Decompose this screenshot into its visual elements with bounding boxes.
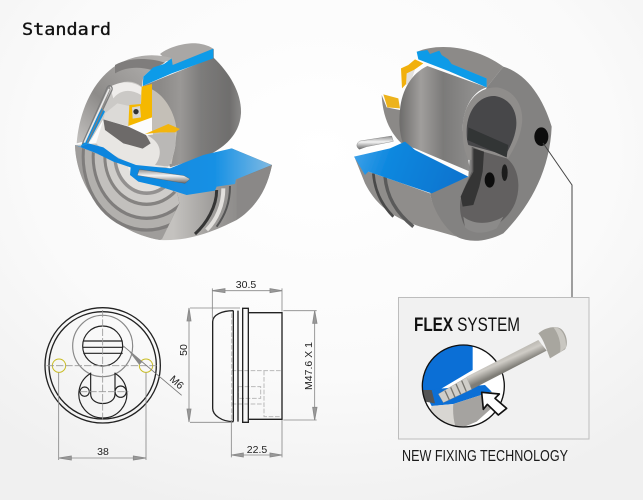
cylinder body <box>399 66 487 172</box>
flex bolt illustration <box>420 327 567 430</box>
key slot <box>103 119 151 149</box>
inner disc <box>90 82 142 142</box>
cylinder body <box>143 57 241 167</box>
threaded cylinder top <box>160 43 214 66</box>
lower threaded section <box>355 158 457 237</box>
yellow cam parts <box>401 59 423 88</box>
spring pin upper <box>82 86 112 144</box>
outer circles <box>45 308 160 423</box>
title: Standard <box>22 20 111 40</box>
upper flange <box>77 55 173 143</box>
spring pin <box>357 136 393 149</box>
technical drawing: front view <box>45 308 182 460</box>
yellow cam parts <box>128 84 152 126</box>
plug ledge <box>103 103 129 126</box>
plug front face <box>96 120 176 168</box>
heading: FLEX SYSTEM <box>414 315 520 336</box>
centre lines <box>47 310 158 420</box>
dimension label 50: 50 <box>178 344 190 356</box>
caption: NEW FIXING TECHNOLOGY <box>402 448 568 465</box>
dimension M47.6 <box>283 311 317 420</box>
panel: flex system <box>398 298 589 439</box>
M6 leader <box>123 346 182 395</box>
dimension 50 extensions <box>190 308 240 422</box>
lower key profile <box>79 373 127 418</box>
body outline <box>213 311 233 422</box>
large rim face <box>430 67 552 241</box>
fixing hole <box>534 127 548 146</box>
illustration: right lock cutaway <box>354 47 552 241</box>
leader line to fixing hole <box>543 143 572 297</box>
fixing holes <box>52 359 66 372</box>
spring pin lower <box>137 169 190 183</box>
dimension 38 <box>59 373 146 460</box>
dimension 30.5 <box>212 288 282 318</box>
bolt shaft <box>467 340 547 389</box>
dimension label M47.6 X 1: M47.6 X 1 <box>303 342 315 390</box>
bore outer ring <box>463 87 522 160</box>
dimension label M6: M6 <box>167 373 186 392</box>
dimension 22.5 <box>231 420 282 457</box>
key recess bowl <box>460 147 518 230</box>
inner shaft <box>152 89 177 164</box>
blue cut surfaces lower <box>354 142 468 193</box>
bolt thread <box>438 377 472 403</box>
dimension 50 <box>187 308 191 422</box>
upper cylinder <box>73 315 133 377</box>
arrow <box>482 392 507 415</box>
technical drawing: side view <box>190 288 317 457</box>
dimension label 22.5: 22.5 <box>247 444 267 456</box>
bore opening <box>467 96 516 155</box>
dimension label 38: 38 <box>97 446 109 458</box>
illustration: left lock cutaway <box>75 43 272 240</box>
blue upper section <box>143 49 213 86</box>
lower body and rings <box>75 82 272 240</box>
hidden detail <box>232 313 281 420</box>
blue lower section <box>75 143 272 195</box>
bolt head <box>538 327 567 358</box>
dimension label 30.5: 30.5 <box>236 279 256 291</box>
blue cut surfaces top <box>417 50 487 87</box>
back threaded section <box>417 47 503 87</box>
